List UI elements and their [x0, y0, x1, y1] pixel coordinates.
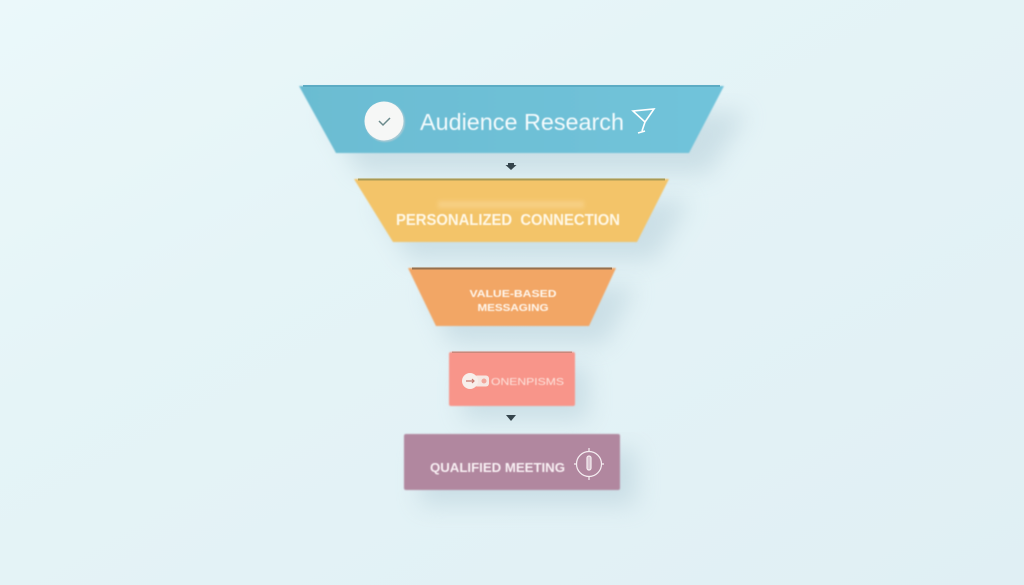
panel: qualified meeting stage: [404, 434, 636, 505]
heading: personalized connection: PERSONALIZED CONNECTION: [396, 212, 620, 229]
faint illegible smudge: [438, 201, 584, 208]
arrow: down 2: [506, 415, 516, 421]
text: stage label: ONENPISMS: [491, 376, 564, 388]
icon: glass: [633, 109, 654, 133]
heading: qualified meeting: QUALIFIED MEETING: [430, 461, 565, 475]
text: value-based messaging: MESSAGING: [478, 302, 548, 314]
text: value-based messaging: [470, 288, 557, 314]
panel: value-based messaging stage: [408, 268, 636, 344]
arrow: down 1: [506, 163, 516, 170]
icon: target: [574, 448, 604, 480]
heading: audience research: Audience Research: [420, 109, 624, 135]
panel: objections stage: [449, 352, 588, 420]
panel: personalized connection stage: [354, 178, 690, 260]
icon: toggle badge: [462, 373, 489, 389]
icon: check badge: [364, 102, 405, 142]
panel: audience research stage: [299, 85, 748, 174]
text: value-based messaging: VALUE-BASED: [470, 288, 557, 300]
